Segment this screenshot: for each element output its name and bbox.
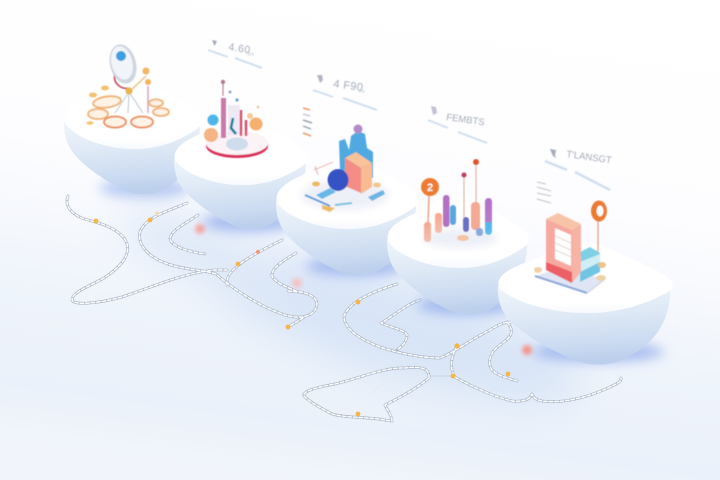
header card 3: FEMBTS — [446, 112, 485, 128]
header card 4: T'LANSGT — [566, 149, 612, 166]
header card 1: sm — [247, 51, 254, 58]
scene 4: bar chart with pins: 2 — [427, 182, 433, 194]
header card 2: 4 F90 — [333, 78, 364, 94]
scene 3: city blocks — [301, 108, 389, 212]
header card 3 — [428, 106, 487, 143]
chain: white links — [67, 196, 621, 421]
header card 1 — [208, 40, 262, 68]
header card 1: 4.60 — [228, 41, 252, 56]
platform 3 — [276, 156, 418, 276]
scene 1: dish and rings — [86, 41, 169, 128]
header card 4 — [537, 149, 612, 203]
platform 4 — [387, 195, 529, 315]
scene 4: bar chart with pins — [421, 159, 498, 248]
platform 1 — [64, 78, 202, 198]
connector nodes — [94, 211, 510, 416]
floor chains — [67, 196, 621, 421]
header card 2 — [313, 75, 377, 110]
header card 2: sm — [358, 88, 365, 95]
scene 5: brick tower with ring pin — [534, 200, 607, 293]
chain: grey under-stroke — [67, 196, 621, 421]
scene 2: round stage with tower — [204, 80, 268, 158]
platform 5 — [498, 242, 673, 365]
platform 2 — [174, 117, 308, 232]
floor shading — [111, 193, 596, 434]
glow markers — [195, 224, 532, 355]
